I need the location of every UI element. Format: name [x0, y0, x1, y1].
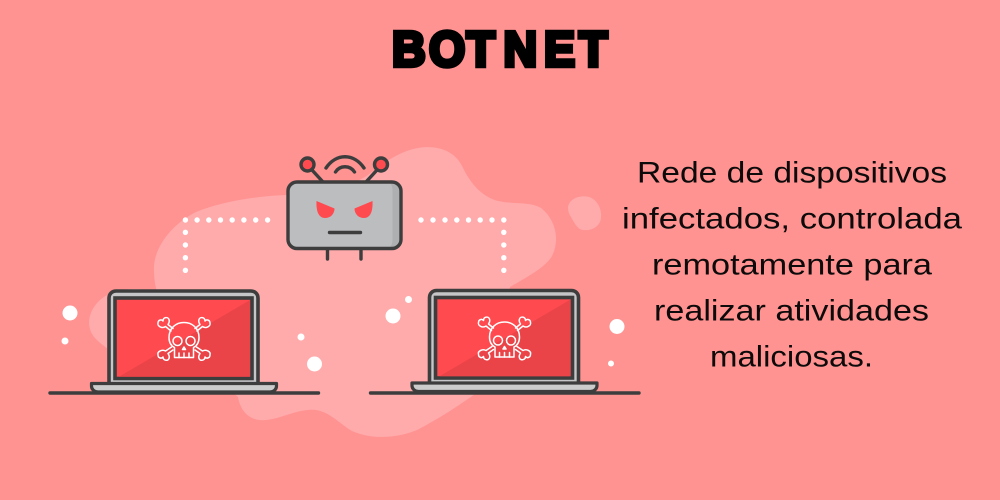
ground line — [370, 391, 639, 395]
laptop lid — [430, 290, 578, 384]
title: BOTNET — [392, 23, 607, 77]
ground line — [50, 391, 318, 395]
laptop screen — [436, 298, 572, 378]
icon: robot — [288, 157, 401, 259]
dotted connector: left — [183, 217, 270, 273]
laptop lid — [109, 291, 258, 384]
description text — [622, 156, 963, 374]
screen shade — [119, 300, 250, 377]
robot wifi signal — [326, 157, 364, 172]
decorative white dots — [62, 296, 624, 372]
laptop base — [92, 384, 276, 392]
screen shade — [440, 300, 570, 376]
robot antennas — [301, 158, 388, 182]
description text: realizar atividades — [654, 294, 929, 328]
icon: skull and crossbones — [478, 317, 531, 360]
description text: infectados, controlada — [622, 202, 963, 236]
description text: maliciosas. — [710, 340, 873, 374]
laptop screen — [115, 298, 252, 378]
icon: skull and crossbones — [158, 318, 210, 360]
description text: remotamente para — [652, 248, 933, 282]
background blob — [89, 147, 601, 437]
description text: Rede de dispositivos — [637, 156, 947, 190]
laptop base — [412, 383, 597, 392]
icon: right laptop — [370, 290, 639, 393]
robot eyes — [316, 201, 373, 218]
robot mouth — [330, 231, 360, 234]
robot legs — [328, 249, 361, 259]
dotted connector: right — [418, 217, 506, 273]
robot body — [288, 182, 401, 248]
icon: left laptop — [50, 291, 318, 393]
